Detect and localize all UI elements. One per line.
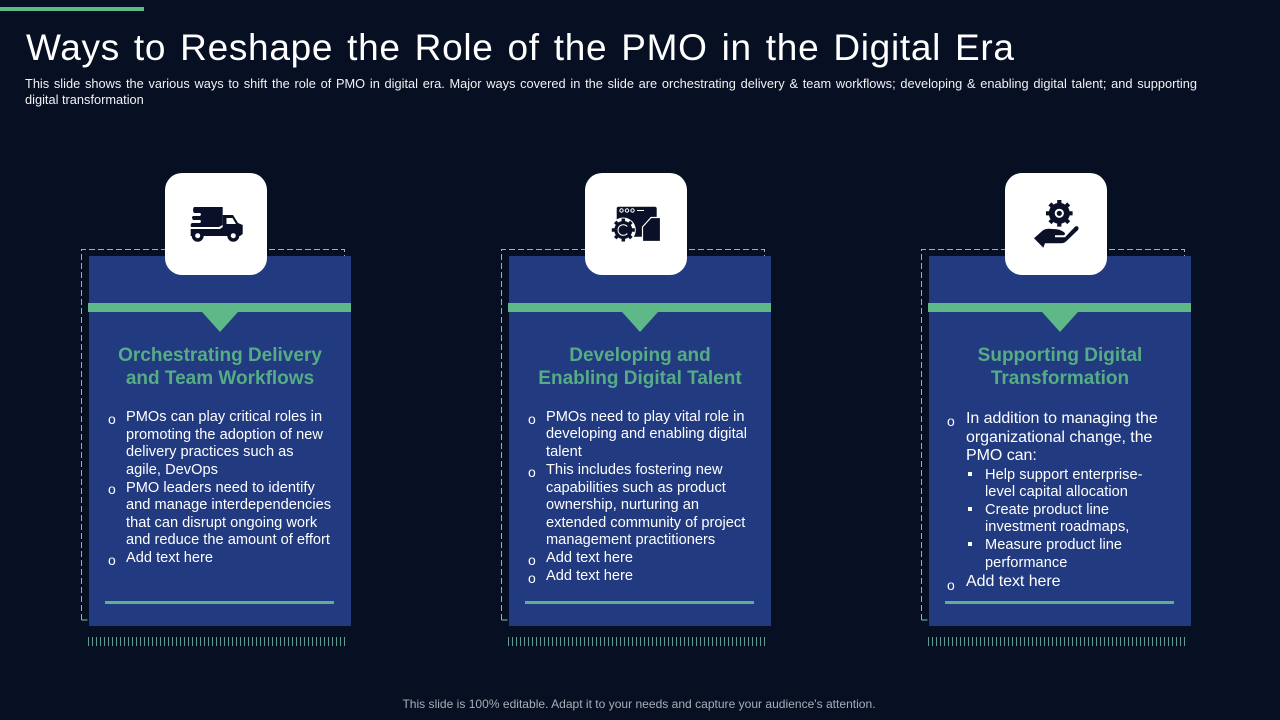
bottom rule <box>105 601 334 604</box>
panel: supporting transformation: o <box>947 413 955 429</box>
panel: orchestrating delivery: PMO leaders need to identify <box>126 480 315 496</box>
text: o <box>528 570 536 586</box>
panel: orchestrating delivery <box>81 173 351 646</box>
subtitle text: This slide shows the various ways to shift the role of PMO in digital era. Major ways covered in the slide are orchestrating delivery & team workflows; developing & enabling digital talent; and supporting <box>25 76 1197 91</box>
heading: Supporting Digital <box>978 345 1142 366</box>
footer note: This slide is 100% editable. Adapt it to your needs and capture your audience's attention. <box>402 697 876 711</box>
panel: orchestrating delivery: promoting the adoption of new <box>126 427 323 443</box>
card background <box>929 256 1191 626</box>
panel: developing talent: capabilities such as product <box>546 480 726 496</box>
heading <box>538 345 742 389</box>
panel: supporting transformation: In addition to managing the <box>966 410 1158 427</box>
bullet list <box>528 409 747 586</box>
icon tile: truck <box>165 173 267 275</box>
green band <box>508 303 771 312</box>
heading: Orchestrating Delivery <box>118 345 322 366</box>
tick strip <box>928 637 1186 646</box>
bottom rule <box>945 601 1174 604</box>
bullet list <box>108 409 331 568</box>
panel: supporting transformation <box>921 173 1191 646</box>
text: that can disrupt ongoing work <box>126 515 317 531</box>
text: performance <box>985 555 1067 571</box>
text: Add text here <box>546 568 633 584</box>
card background <box>89 256 351 626</box>
heading <box>978 345 1142 389</box>
panel: developing talent <box>501 173 771 646</box>
green band <box>928 303 1191 312</box>
panel: orchestrating delivery: delivery practices such as <box>126 444 294 460</box>
bottom rule <box>525 601 754 604</box>
panel: orchestrating delivery: agile, DevOps <box>126 462 218 478</box>
icon tile: browser gear and document <box>585 173 687 275</box>
tick strip <box>508 637 766 646</box>
text: Measure product line <box>985 537 1122 553</box>
tick strip <box>88 637 346 646</box>
text: Add text here <box>546 550 633 566</box>
panel: orchestrating delivery: PMOs can play critical roles in <box>126 409 322 425</box>
title: Ways to Reshape the Role of the PMO in the Digital Era <box>26 27 1015 68</box>
text: Add text here <box>126 550 213 566</box>
dashed outline <box>81 249 345 620</box>
dashed outline <box>921 249 1185 620</box>
text: and reduce the amount of effort <box>126 532 330 548</box>
dashed outline <box>501 249 765 620</box>
panel: supporting transformation: organizational change, the <box>966 429 1152 446</box>
text: o <box>528 552 536 568</box>
panel: developing talent: talent <box>546 444 582 460</box>
text: management practitioners <box>546 532 715 548</box>
accent bar <box>0 7 144 11</box>
panel: developing talent: developing and enabling digital <box>546 426 747 442</box>
panel: developing talent: o <box>528 464 536 480</box>
panel: supporting transformation: Help support enterprise- <box>985 467 1143 483</box>
text: and manage interdependencies <box>126 497 331 513</box>
heading: Developing and <box>569 345 711 366</box>
pointer triangle <box>622 312 658 332</box>
text: Create product line <box>985 502 1109 518</box>
panel: supporting transformation: level capital allocation <box>985 484 1128 500</box>
card background <box>509 256 771 626</box>
heading: and Team Workflows <box>126 368 314 389</box>
panel: supporting transformation: PMO can: <box>966 447 1037 464</box>
text: Add text here <box>966 573 1061 590</box>
panel: developing talent: This includes fostering new <box>546 462 723 478</box>
subtitle text <box>25 76 1197 107</box>
text: investment roadmaps, <box>985 519 1129 535</box>
text: o <box>947 577 955 593</box>
panel: developing talent: o <box>528 411 536 427</box>
green band <box>88 303 351 312</box>
heading: Enabling Digital Talent <box>538 368 742 389</box>
text: ownership, nurturing an <box>546 497 699 513</box>
text: o <box>108 552 116 568</box>
bullet list <box>947 410 1158 593</box>
panel: developing talent: PMOs need to play vital role in <box>546 409 745 425</box>
heading: Transformation <box>991 368 1129 389</box>
icon tile: hand holding gear <box>1005 173 1107 275</box>
panel: orchestrating delivery: o <box>108 411 116 427</box>
subtitle text: digital transformation <box>25 92 144 107</box>
pointer triangle <box>1042 312 1078 332</box>
text: extended community of project <box>546 515 745 531</box>
panel: orchestrating delivery: o <box>108 481 116 497</box>
pointer triangle <box>202 312 238 332</box>
heading <box>118 345 322 389</box>
